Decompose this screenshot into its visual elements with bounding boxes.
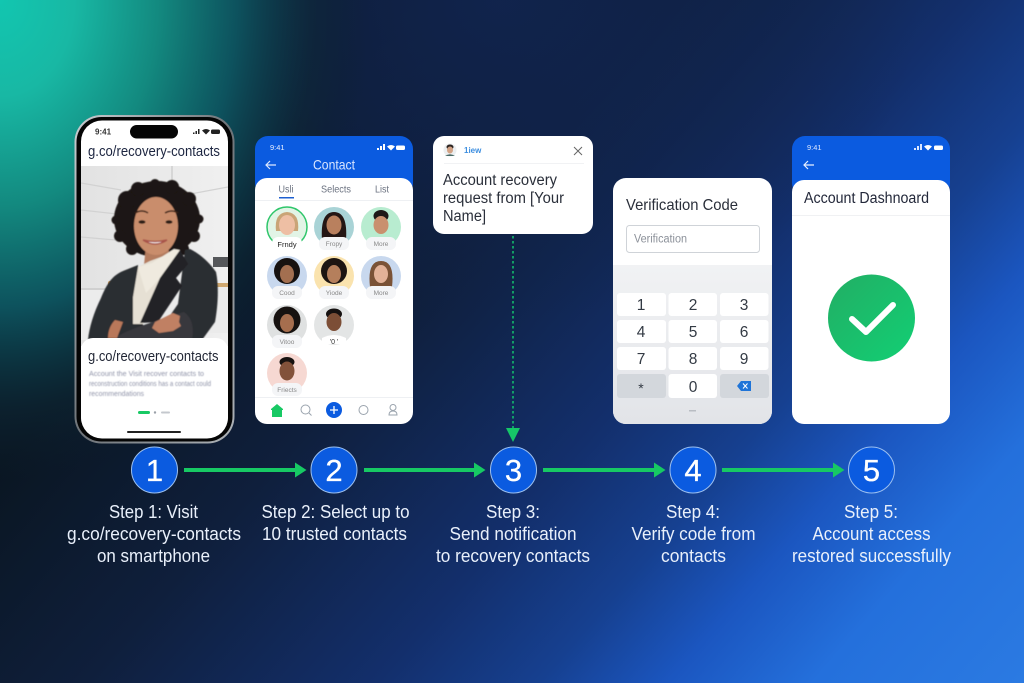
status bar: [95, 125, 220, 138]
keys: [617, 293, 769, 398]
notification message: Name]: [443, 208, 486, 225]
blue header: 9:41: [807, 143, 822, 152]
phone 1: visit recovery page: [74, 115, 234, 444]
face: [134, 197, 178, 255]
keys: 1: [637, 297, 645, 314]
arrow 4 to 5: [722, 462, 844, 478]
dotted arrow from notification to step 3: [506, 236, 520, 442]
phone 5: account dashboard: [792, 136, 950, 424]
caption step 1: Step 1: Visit: [109, 502, 198, 522]
lapel: [140, 250, 188, 323]
step 3 badge: [490, 447, 536, 493]
notification message: request from [Your: [443, 190, 564, 207]
caption step 4: Step 4:: [666, 502, 720, 522]
contact: Fredy: Frndy: [277, 240, 297, 249]
notification message: Account recovery: [443, 172, 557, 189]
tabs: [255, 184, 413, 201]
shirt: [132, 256, 162, 325]
home indicator: [127, 431, 181, 433]
step 2 badge: 2: [325, 453, 343, 488]
tabs: Usli: [278, 184, 294, 196]
step captions: [67, 502, 951, 566]
step 1 badge: [132, 447, 178, 493]
contact: Vitoo: [267, 305, 307, 348]
step 2 badge: [311, 447, 357, 493]
tabs: Selects: [321, 184, 351, 196]
hands: [152, 313, 181, 333]
caption step 5: [792, 502, 951, 566]
contact: Cood: Cood: [279, 290, 295, 297]
keys: 6: [740, 324, 748, 341]
contact: More 1: [361, 207, 401, 250]
caption step 5: Step 5:: [844, 502, 898, 522]
contact: Yiode: [314, 256, 354, 299]
caption step 2: [262, 502, 410, 544]
curly hair: [112, 179, 204, 257]
URL heading: g.co/recovery-contacts: [88, 143, 220, 160]
phone frame: [74, 115, 234, 444]
caption step 4: [632, 502, 756, 566]
contact: unnamed: [314, 305, 354, 346]
keys: *: [638, 380, 644, 396]
card body text: [89, 371, 211, 398]
caption step 4: contacts: [661, 546, 726, 566]
code input: Verification: [634, 234, 687, 246]
keys: 4: [637, 324, 646, 341]
phone 2: select contacts: [255, 136, 413, 424]
contact: Yiode: Yiode: [326, 290, 343, 297]
caption step 5: restored successfully: [792, 546, 951, 566]
arrow 2 to 3: [364, 462, 486, 478]
caption step 3: [436, 502, 590, 566]
white contacts panel: [255, 178, 413, 424]
keys: 9: [740, 351, 748, 368]
caption step 3: to recovery contacts: [436, 546, 590, 566]
blue header: [255, 136, 413, 196]
step flow: [132, 447, 894, 493]
contact: Friects: [267, 353, 307, 396]
white panel: [792, 180, 950, 424]
step 5 badge: 5: [863, 453, 880, 488]
pager dots: [138, 411, 170, 414]
info card: [81, 338, 228, 438]
notification card: [433, 136, 593, 234]
blue header: 9:41: [270, 143, 285, 152]
step 4 badge: 4: [684, 453, 702, 488]
keys: 8: [689, 351, 697, 368]
caption step 3: Step 3:: [486, 502, 540, 522]
crossed arms: [118, 312, 192, 338]
blue header: Contact: [313, 156, 355, 172]
arrow 3 to 4: [543, 462, 666, 478]
caption step 2: 10 trusted contacts: [262, 524, 407, 544]
card body text: recommendations: [89, 391, 144, 398]
contact: unnamed: '0 ': [330, 339, 338, 346]
close icon: [574, 147, 582, 155]
notification message: [443, 172, 564, 225]
keys: 7: [637, 351, 645, 368]
card body text: reconstruction conditions has a contact could: [89, 381, 211, 388]
contact: Vitoo: Vitoo: [280, 339, 295, 346]
caption step 1: [67, 502, 241, 566]
bottom nav bar: [255, 397, 413, 418]
contact: More 2: [361, 256, 401, 299]
caption step 3: Send notification: [450, 524, 576, 544]
contact: Fredy: [267, 207, 307, 250]
code input: [626, 226, 760, 252]
sender avatar: [444, 144, 456, 156]
neck: [144, 250, 170, 264]
keys: 3: [740, 297, 748, 314]
keys: 5: [689, 324, 697, 341]
keys: 0: [689, 379, 698, 396]
contact: Cood: [267, 256, 307, 299]
card body text: Account the Visit recover contacts to: [89, 371, 204, 378]
arrow 1 to 2: [184, 462, 306, 478]
step 3 badge: 3: [505, 453, 522, 488]
contact: Fropy: [314, 207, 354, 250]
contact: More 2: More: [374, 290, 389, 297]
success check icon: [828, 274, 915, 362]
blue header: [792, 136, 950, 196]
contact: Friects: Friects: [277, 387, 298, 394]
step 5 badge: [848, 447, 894, 493]
caption step 1: g.co/recovery-contacts: [67, 524, 241, 544]
keys: 2: [689, 297, 697, 314]
sender name: 1iew: [464, 146, 482, 155]
status bar: 9:41: [95, 128, 112, 136]
tabs: List: [375, 184, 389, 196]
contact: More 1: More: [374, 241, 389, 248]
caption step 2: Step 2: Select up to: [262, 502, 410, 522]
card heading: g.co/recovery-contacts: [88, 348, 218, 365]
step 4 badge: [670, 447, 716, 493]
caption step 4: Verify code from: [632, 524, 756, 544]
heading: Verification Code: [626, 197, 738, 214]
photo: smiling woman with crossed arms: [81, 166, 228, 346]
caption step 5: Account access: [812, 524, 930, 544]
contact avatars: [267, 207, 401, 396]
contact: Fropy: Fropy: [326, 241, 343, 248]
jacket: [88, 249, 218, 340]
caption step 1: on smartphone: [97, 546, 210, 566]
phone 4: verification code keypad: [613, 178, 772, 424]
step 1 badge: 1: [146, 453, 163, 488]
heading: Account Dashnoard: [804, 190, 929, 207]
keypad tray: [613, 265, 772, 424]
